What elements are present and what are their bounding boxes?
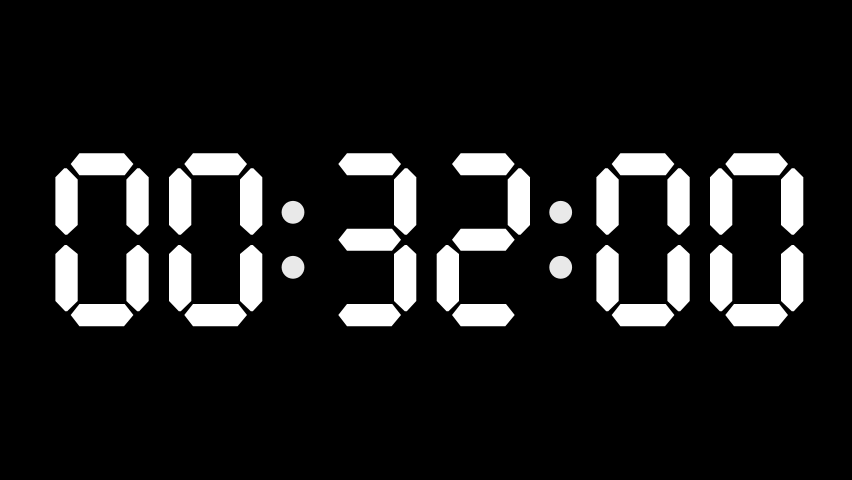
digit: seconds tens 0 <box>596 153 690 326</box>
digit: hours units 0 <box>169 153 262 326</box>
digit: seconds units 0 <box>710 153 803 326</box>
digit: minutes units 2 <box>437 153 530 326</box>
colon: hours and minutes separator <box>282 201 304 279</box>
colon: minutes and seconds separator <box>549 201 572 279</box>
digit: minutes tens 3 <box>338 153 416 326</box>
digit: hours tens 0 <box>55 153 149 326</box>
